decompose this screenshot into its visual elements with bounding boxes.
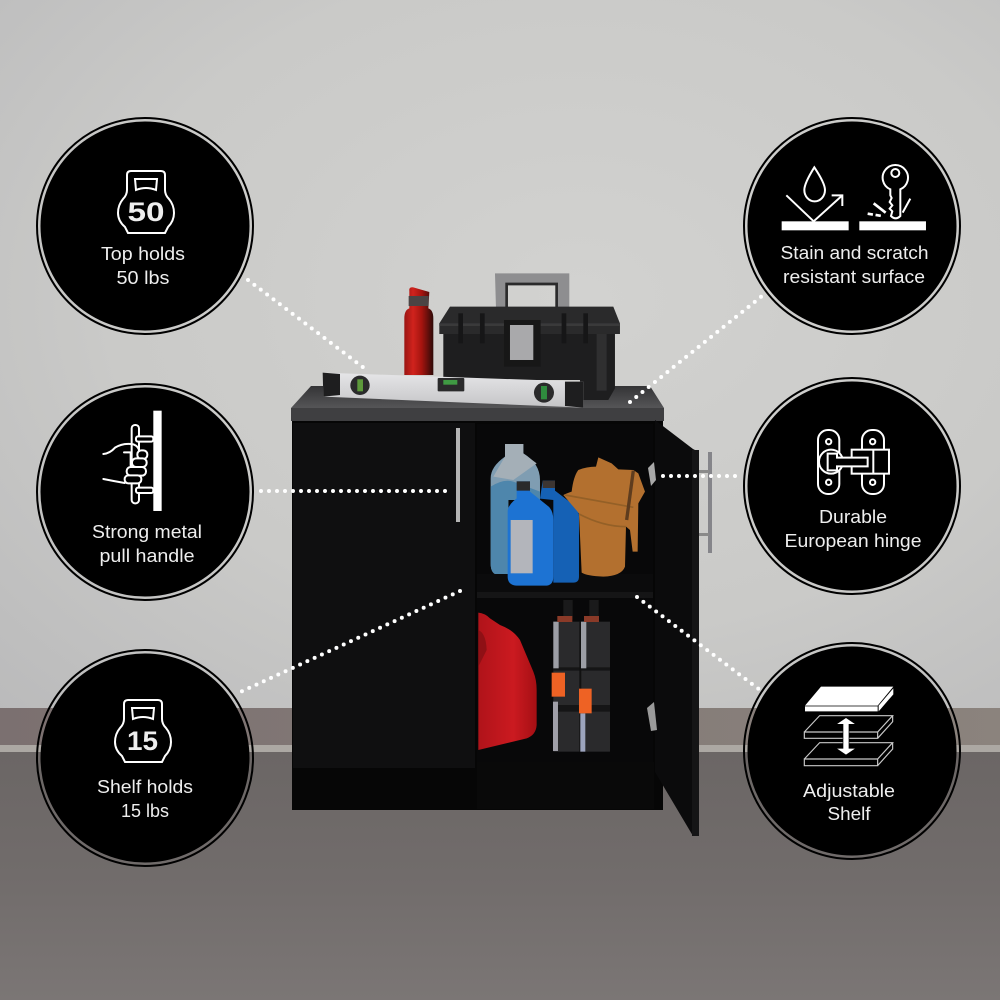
icon: 50 lb kettlebell bbox=[118, 171, 174, 233]
icon: stain resistant droplet bbox=[782, 167, 849, 230]
label: strong metal: Strong metal bbox=[92, 522, 202, 542]
blue oil bottles bbox=[508, 481, 579, 586]
dotted leader: adjustable shelf bbox=[637, 597, 760, 690]
background: wall bbox=[0, 0, 1000, 710]
label: shelf: Shelf bbox=[828, 804, 872, 824]
label: adjustable: Adjustable bbox=[803, 781, 895, 801]
upper hinge bbox=[648, 462, 656, 486]
parts organizers bbox=[552, 600, 610, 752]
dotted leader: hinge bbox=[663, 474, 742, 478]
shelf bbox=[477, 574, 653, 598]
label: European hinge: European hinge bbox=[784, 531, 922, 551]
label: shelf holds: Shelf holds bbox=[97, 777, 193, 797]
badge: top holds 50 lbs bbox=[37, 118, 253, 334]
icon: hand gripping handle bbox=[103, 411, 162, 511]
label: stain and scratch: Stain and scratch bbox=[780, 243, 928, 263]
lower hinge bbox=[647, 702, 657, 731]
cabinet interior bbox=[477, 424, 653, 764]
left door bbox=[293, 423, 475, 768]
cabinet top bbox=[291, 386, 664, 421]
cabinet bbox=[291, 386, 664, 810]
red bottle bbox=[404, 287, 433, 375]
icon: 15 lb kettlebell: 15 bbox=[127, 726, 158, 756]
label: top holds: Top holds bbox=[101, 244, 185, 264]
badge: strong metal pull handle bbox=[37, 384, 253, 600]
badge: durable European hinge bbox=[744, 378, 960, 594]
background: baseboard bbox=[0, 708, 1000, 752]
dotted leader: surface bbox=[630, 296, 762, 402]
dotted leader: pull handle bbox=[254, 489, 445, 493]
label: resistant surface: resistant surface bbox=[783, 267, 925, 287]
spirit level bbox=[323, 373, 583, 408]
label: pull handle: pull handle bbox=[100, 546, 194, 566]
icon: 15 lb kettlebell bbox=[115, 700, 171, 762]
toolbox bbox=[439, 273, 620, 400]
right door handle bbox=[699, 452, 712, 553]
red gas can bbox=[478, 613, 537, 750]
icon: adjustable shelf bbox=[804, 687, 893, 766]
left door handle bbox=[456, 428, 460, 522]
cabinet base and carcass bbox=[292, 420, 663, 810]
background: floor bbox=[0, 752, 1000, 1000]
label: 50 lbs: 50 lbs bbox=[116, 268, 170, 288]
icon: scratch resistant key bbox=[859, 165, 926, 230]
badge: stain and scratch resistant surface bbox=[744, 118, 960, 334]
dotted leader: top holds bbox=[248, 280, 364, 368]
orange tool bag bbox=[563, 457, 645, 577]
dotted leader: shelf holds bbox=[236, 591, 460, 694]
label: 15 lbs: 15 lbs bbox=[121, 801, 169, 821]
blue jug bbox=[491, 444, 540, 574]
label: durable: Durable bbox=[819, 507, 887, 527]
cabinet bottom panel bbox=[477, 762, 654, 809]
open right door bbox=[647, 420, 712, 836]
icon: hinge bbox=[818, 430, 889, 494]
badge: adjustable shelf bbox=[744, 643, 960, 859]
badge: shelf holds 15 lbs bbox=[37, 650, 253, 866]
icon: 50 lb kettlebell: 50 bbox=[128, 197, 164, 227]
